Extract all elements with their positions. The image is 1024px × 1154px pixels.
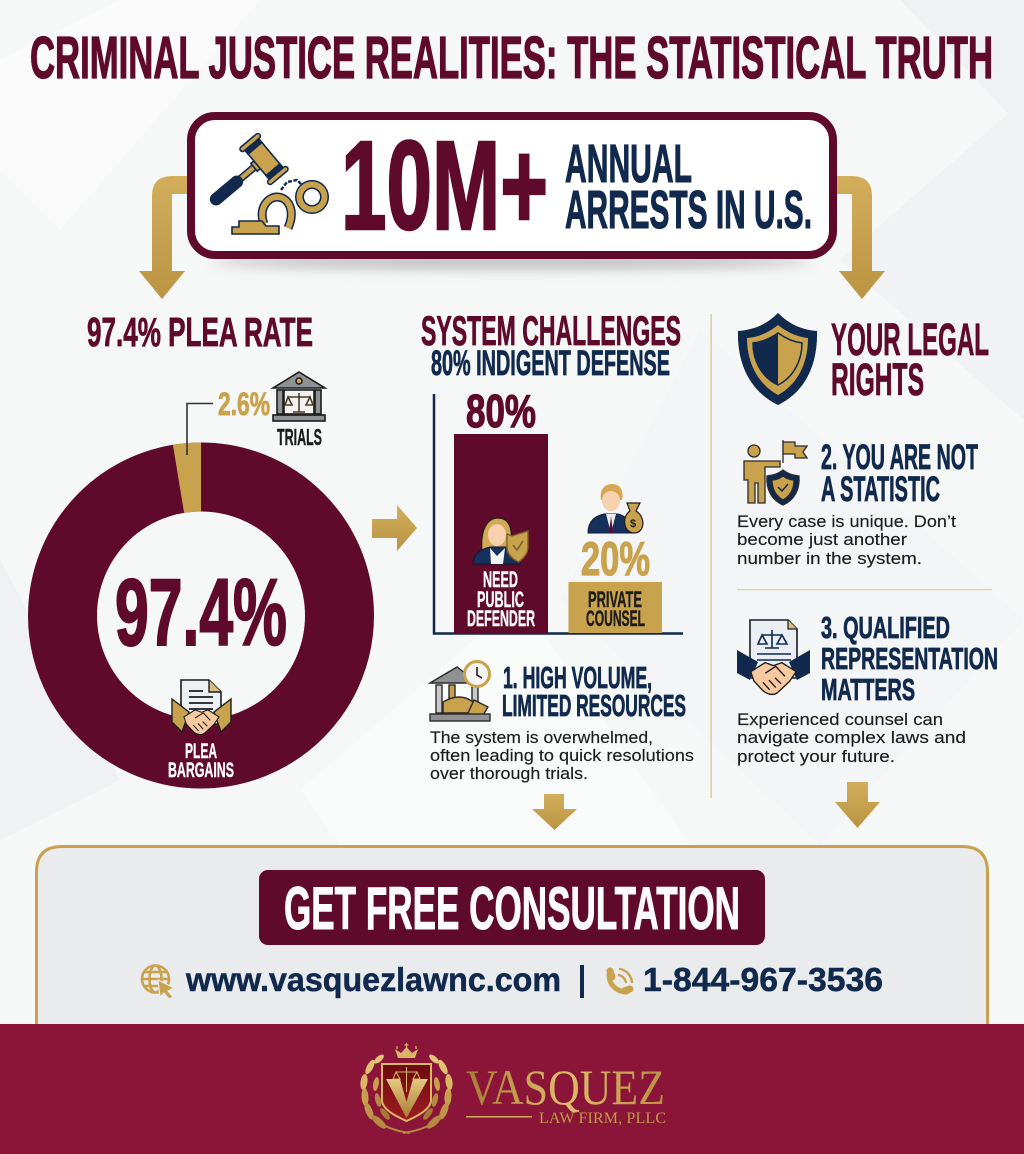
- arrow: right elbow from banner: [830, 176, 885, 299]
- section 1: high volume, limited resources: LIMITED RESOURCES: [502, 688, 686, 723]
- bar: need public defender 80%: NEED: [483, 567, 518, 592]
- banner: 10M+ annual arrests: ANNUAL: [565, 134, 692, 194]
- section 2: you are not a statistic: [737, 438, 978, 568]
- label: plea bargains: PLEA: [185, 740, 217, 763]
- divider: column: [710, 314, 992, 798]
- heading: your legal rights: RIGHTS: [831, 354, 924, 405]
- crown: [395, 1047, 418, 1058]
- arrow: left elbow from banner: [139, 176, 195, 299]
- arrow: down from section 3: [835, 782, 880, 828]
- section 3: qualified representation matters: protect your future.: [737, 747, 895, 766]
- body text: Every case is unique. Don’t: [737, 512, 956, 531]
- bar: private counsel 20%: 20%: [581, 532, 650, 585]
- wedge: trials 2.6%: [173, 442, 201, 513]
- section 1: high volume, limited resources: [430, 660, 694, 783]
- icon: courthouse: [273, 372, 325, 421]
- donut chart: plea bargains vs trials: BARGAINS: [168, 759, 234, 782]
- callout: trials 2.6%: 2.6%: [218, 386, 270, 422]
- footer band: [0, 1024, 1024, 1154]
- bar: need public defender 80%: [454, 385, 548, 633]
- icon: shield: [738, 313, 817, 405]
- laurels: [359, 1053, 410, 1133]
- bar: private counsel 20%: COUNSEL: [586, 606, 645, 631]
- banner: 10M+ annual arrests: [191, 115, 833, 269]
- bar: need public defender 80%: 80%: [466, 385, 536, 437]
- website: www.vasquezlawnc.com: [185, 961, 561, 998]
- bar chart: defense representation: [434, 385, 683, 634]
- icon: phone: [609, 969, 632, 992]
- icon: public defender: [473, 518, 528, 564]
- callout: trials 2.6%: [187, 372, 325, 455]
- icon: globe: [142, 966, 174, 999]
- banner: 10M+ annual arrests: 10M+: [341, 115, 548, 256]
- logo: vasquez law firm: VASQUEZ: [466, 1059, 665, 1115]
- section 3: qualified representation matters: MATTERS: [821, 672, 915, 707]
- section 3: qualified representation matters: 3. QUALIFIED: [821, 610, 950, 645]
- section 1: high volume, limited resources: often leading to quick resolutions: [430, 746, 694, 765]
- bar: private counsel 20%: [568, 484, 662, 633]
- callout: trials 2.6%: TRIALS: [277, 424, 322, 450]
- shield: [382, 1064, 431, 1121]
- section 3: qualified representation matters: navigate complex laws and: [737, 728, 966, 747]
- donut chart: plea bargains vs trials: [62, 442, 340, 782]
- icon: private counsel: [588, 484, 643, 533]
- section 1: high volume, limited resources: 1. HIGH VOLUME,: [503, 660, 652, 695]
- bar: need public defender 80%: DEFENDER: [467, 606, 535, 631]
- heading: your legal rights: [738, 313, 989, 405]
- banner: 10M+ annual arrests: ARRESTS IN U.S.: [565, 180, 812, 240]
- bar: need public defender 80%: PUBLIC: [477, 587, 524, 612]
- heading: system challenges: [421, 307, 681, 383]
- icon: document with handshake: [737, 620, 810, 694]
- arrow: down from section 1: [532, 794, 577, 830]
- separator: [580, 965, 584, 998]
- body text: Experienced counsel can: [737, 710, 943, 729]
- section 2: you are not a statistic: become just another: [737, 530, 907, 549]
- icon: plea handshake: [172, 680, 231, 735]
- bar: private counsel 20%: PRIVATE: [588, 587, 642, 612]
- section 3: qualified representation matters: [737, 610, 998, 766]
- section 2: you are not a statistic: number in the system.: [737, 549, 922, 568]
- button: get free consultation: [259, 870, 765, 945]
- icon: person with flag and shield: [744, 440, 807, 505]
- logo: vasquez law firm: [359, 1043, 666, 1133]
- heading: system challenges: 80% INDIGENT DEFENSE: [431, 344, 670, 383]
- icon: crest: [359, 1043, 454, 1133]
- phone number: 1-844-967-3536: [643, 961, 883, 998]
- icon: private counsel: $: [630, 518, 636, 530]
- value: 97.4%: 97.4%: [115, 560, 287, 666]
- panel: call to action: [36, 846, 988, 1026]
- logo: vasquez law firm: LAW FIRM, PLLC: [539, 1110, 666, 1127]
- heading: system challenges: SYSTEM CHALLENGES: [421, 307, 681, 354]
- arrow: right to system challenges: [372, 505, 417, 551]
- heading: plea rate: 97.4% PLEA RATE: [87, 309, 313, 355]
- icon: courthouse with clock: [430, 662, 490, 721]
- body text: The system is overwhelmed,: [430, 728, 653, 747]
- section 1: high volume, limited resources: over thorough trials.: [430, 764, 588, 783]
- icon: gavel and handcuffs: [196, 133, 324, 234]
